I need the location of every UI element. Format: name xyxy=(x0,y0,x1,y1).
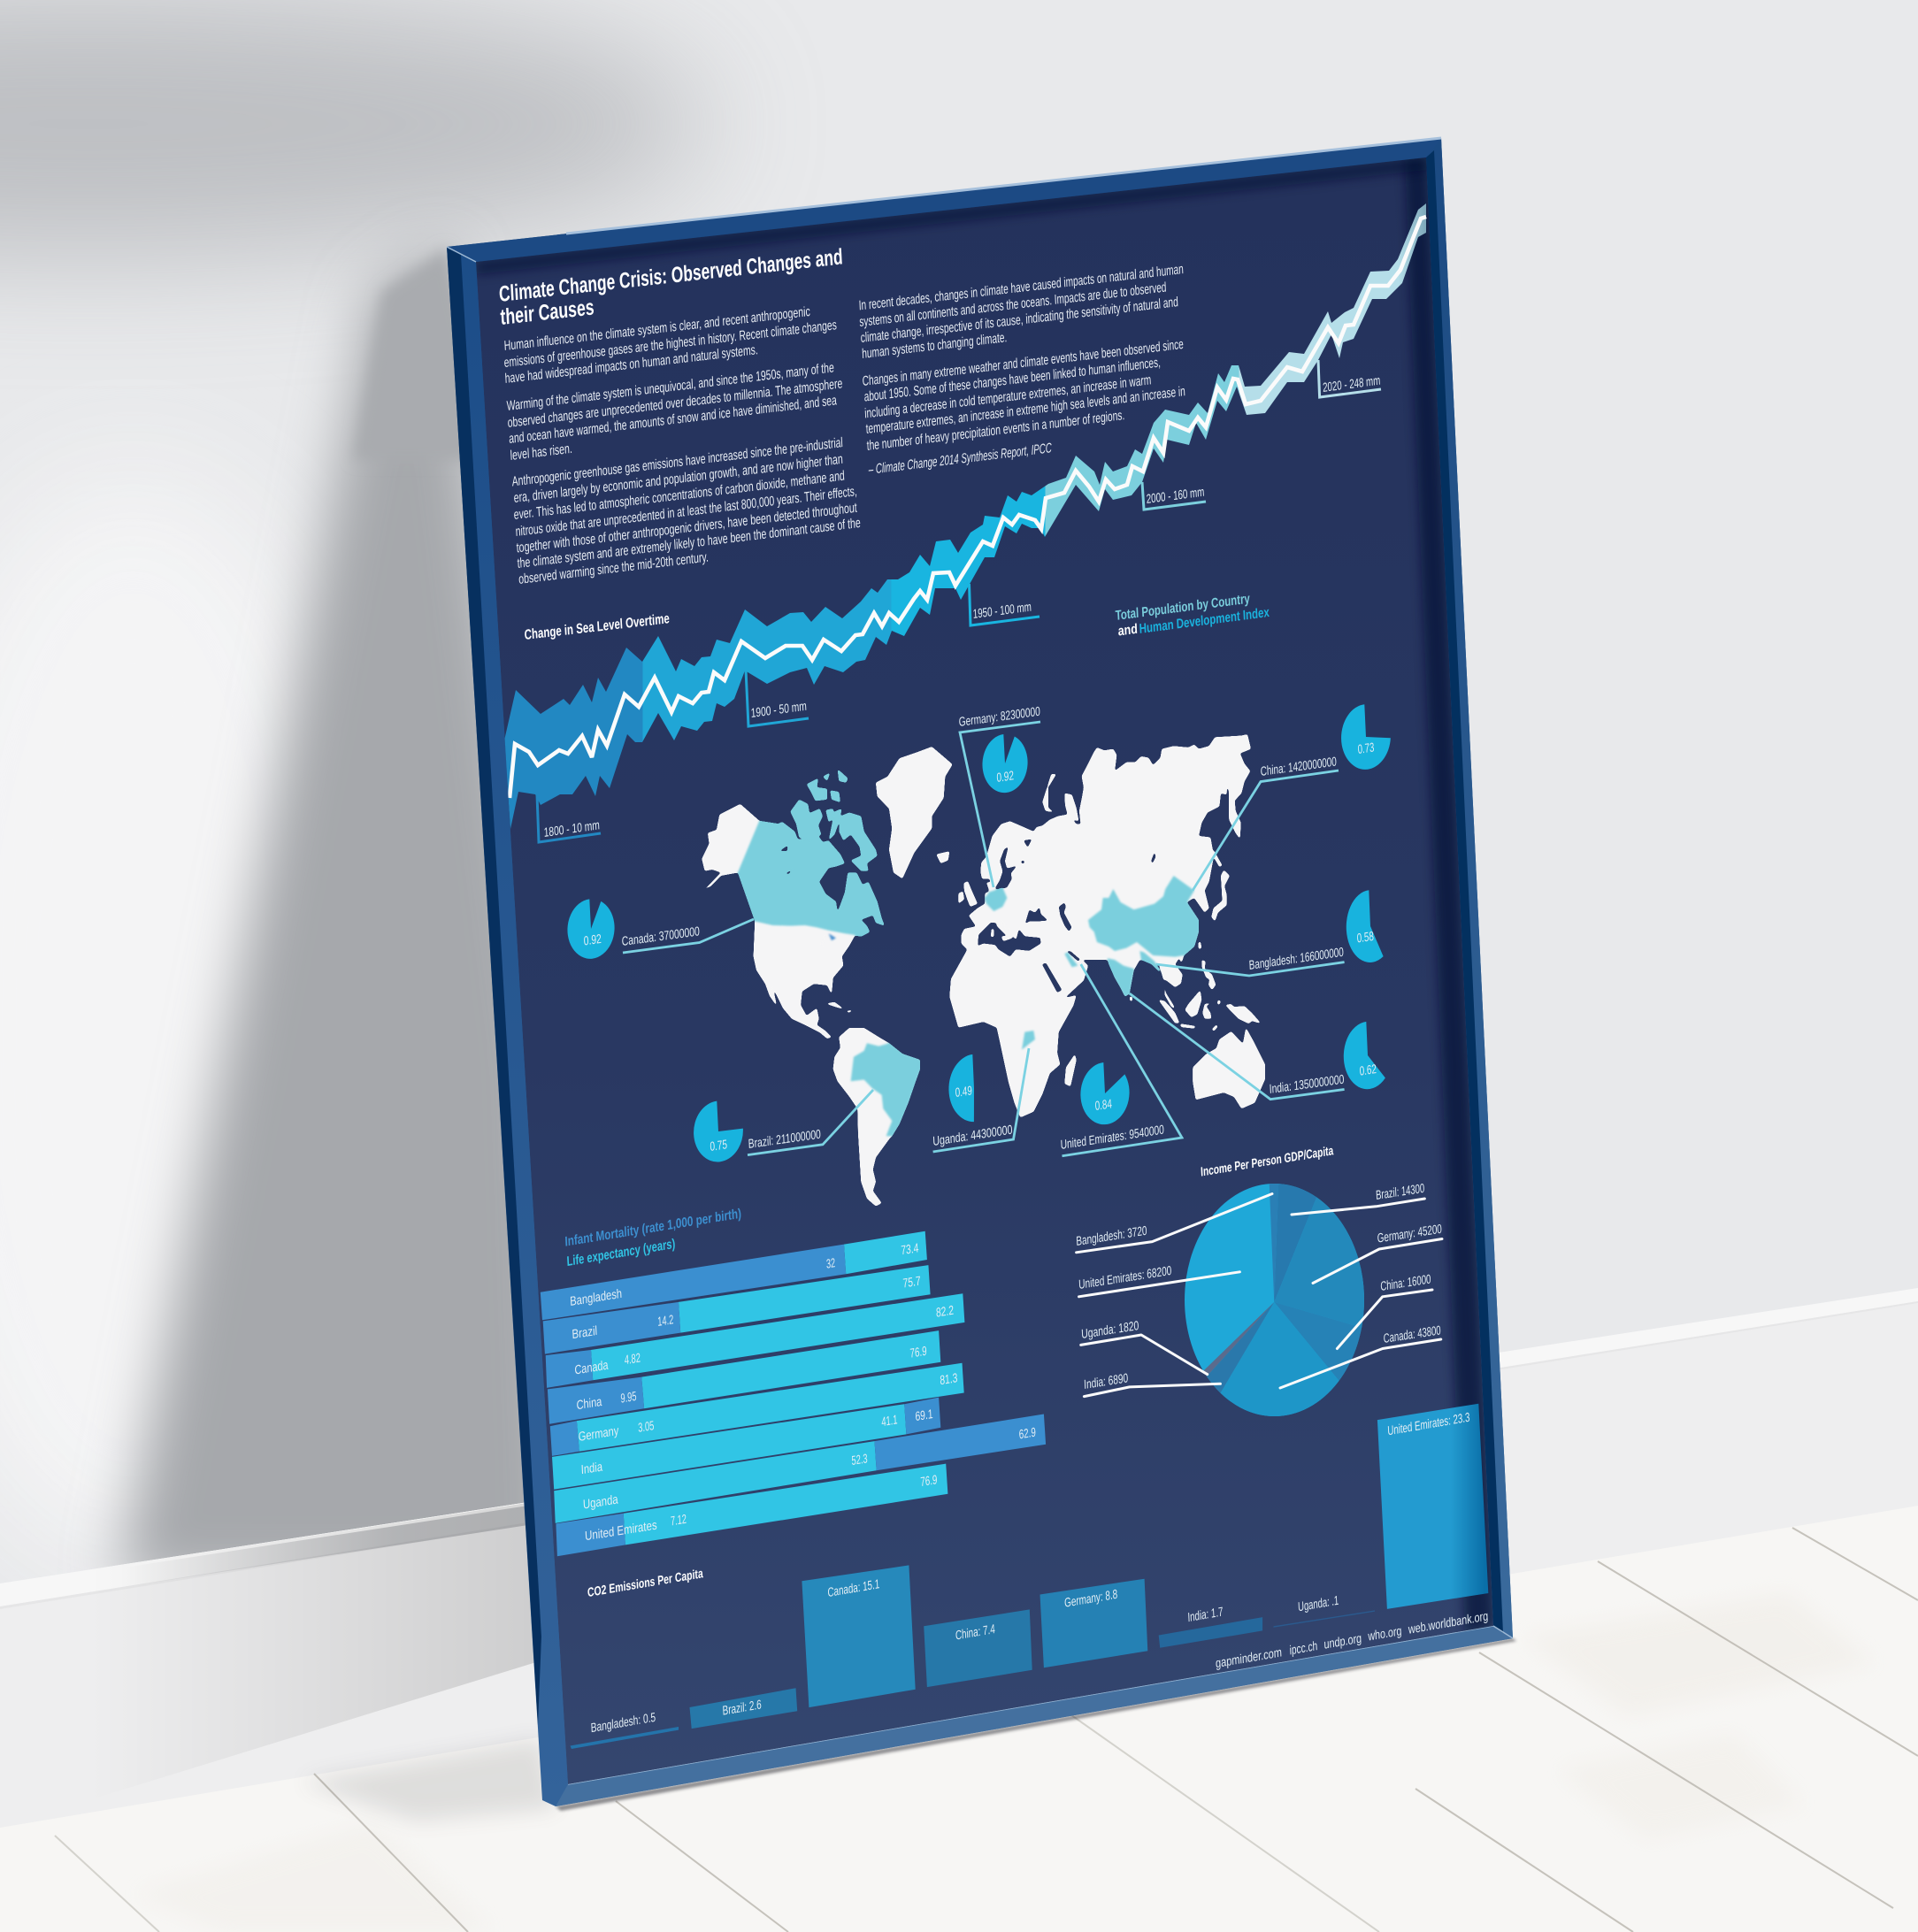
callout: China xyxy=(1193,702,1392,891)
callout: Brazil: Brazil: 211000000 xyxy=(748,1128,821,1152)
text column: right: including a decrease in cold temperature extremes, an increase in warm xyxy=(864,372,1152,421)
bar labels: Brazil xyxy=(572,1324,598,1342)
bar labels xyxy=(570,1241,1036,1544)
Alaska xyxy=(696,804,759,893)
map heading: Total Population by Country xyxy=(1115,592,1250,624)
CO2 labels: Bangladesh: 0.5 xyxy=(590,1711,656,1736)
map heading: Human Development Index xyxy=(1139,605,1270,637)
marker 2000 xyxy=(1142,482,1206,510)
pie labels: Brazil: 14300 xyxy=(1376,1182,1425,1203)
marker 1900: 1900 - 50 mm xyxy=(750,700,807,721)
bar labels: 82.2 xyxy=(936,1304,954,1321)
text column: right: Changes in many extreme weather and climate events have been observed since xyxy=(862,337,1184,389)
text column: left xyxy=(503,304,861,587)
highlighted countries xyxy=(985,876,1199,1050)
pie leaders xyxy=(1077,1194,1442,1397)
text column: right: – Climate Change 2014 Synthesis Report, IPCC xyxy=(868,441,1053,478)
sources: ipcc.ch xyxy=(1289,1639,1318,1658)
Brazil xyxy=(851,1043,920,1136)
callout: Bangladesh xyxy=(1156,889,1384,976)
callout: China: 0.73 xyxy=(1357,740,1375,757)
CO2 labels: India: 1.7 xyxy=(1187,1605,1224,1625)
text column: left: Human influence on the climate system is clear, and recent anthropogenic xyxy=(503,304,810,354)
poster sheet xyxy=(476,157,1493,1784)
sources xyxy=(1216,1609,1488,1671)
callout: India xyxy=(1130,993,1385,1100)
text column: right xyxy=(858,262,1185,478)
bar labels: Germany xyxy=(578,1424,619,1445)
bar labels: 75.7 xyxy=(902,1274,921,1292)
map: Americas and Greenland xyxy=(696,747,953,1206)
marker 1950: 1950 - 100 mm xyxy=(972,601,1032,622)
pie labels: Bangladesh: 3720 xyxy=(1076,1224,1147,1249)
callout: Brazil: 0.75 xyxy=(710,1138,727,1154)
intro heading: their Causes xyxy=(500,295,595,330)
callout: Brazil xyxy=(692,1090,873,1165)
text column: left: era, driven largely by economic and population growth, and are now higher than xyxy=(513,452,843,506)
intro heading xyxy=(499,248,842,325)
bar labels: 76.9 xyxy=(909,1345,927,1361)
callout: Germany: 0.92 xyxy=(996,769,1014,786)
bar labels: 32 xyxy=(826,1256,835,1272)
bar labels: Uganda xyxy=(583,1492,619,1513)
CO2 labels: Germany: 8.8 xyxy=(1064,1588,1118,1611)
map: Eurasia, Africa and Oceania xyxy=(949,734,1265,1117)
callout: United Emirates: United Emirates: 9540000 xyxy=(1060,1123,1164,1153)
bar labels: Bangladesh xyxy=(570,1287,622,1309)
uncertainty band xyxy=(504,203,1426,829)
wooden floor xyxy=(0,1506,1918,1932)
callout: Bangladesh: Bangladesh: 166000000 xyxy=(1248,946,1344,973)
marker 1900 xyxy=(746,670,809,726)
bar labels: 9.95 xyxy=(620,1390,637,1407)
bar labels: 76.9 xyxy=(920,1473,938,1490)
marker 2020: 2020 - 248 mm xyxy=(1323,374,1381,395)
legend: Infant Mortality (rate 1,000 per birth) xyxy=(564,1207,741,1250)
text column: left: observed changes are unprecedented over decades to millennia. The atmosphere xyxy=(507,376,843,431)
bar labels: India xyxy=(580,1460,603,1477)
pie wedges xyxy=(1130,1168,1422,1449)
chart heading: Change in Sea Level Overtime xyxy=(524,611,670,643)
CO2 labels: Brazil: 2.6 xyxy=(722,1698,762,1719)
text column: left: emissions of greenhouse gases are the highest in history. Recent climate changes xyxy=(503,318,837,371)
chart: income per person pie xyxy=(1076,1144,1442,1449)
pie labels: Uganda: 1820 xyxy=(1081,1319,1139,1342)
text column: left: nitrous oxide that are unprecedented in at least the last 800,000 years. Their effects, xyxy=(515,484,857,540)
pie labels: Canada: 43800 xyxy=(1383,1323,1441,1346)
bar labels: Canada xyxy=(574,1358,610,1378)
text column: left: level has risen. xyxy=(510,441,572,464)
baseboard xyxy=(0,1288,1918,1828)
callout: India: India: 1350000000 xyxy=(1269,1073,1345,1097)
legend xyxy=(564,1207,741,1269)
islands xyxy=(958,774,1262,1086)
text column: left: observed warming since the mid-20th century. xyxy=(518,549,709,587)
text column: left: Warming of the climate system is unequivocal, and since the 1950s, many of the xyxy=(506,360,834,414)
marker 2020 xyxy=(1318,360,1381,397)
text column: right: systems on all continents and across the oceans. Impacts are due to observed xyxy=(859,280,1167,330)
CO2 bars xyxy=(570,1404,1488,1749)
text column: left: together with those of other anthropogenic drivers, have been detected throughout xyxy=(516,501,858,556)
Canada xyxy=(738,769,885,937)
CO2 labels: Canada: 15.1 xyxy=(827,1577,880,1600)
callout: India: 0.62 xyxy=(1359,1062,1377,1079)
CO2 labels: United Emirates: 23.3 xyxy=(1387,1411,1470,1438)
CO2 labels: Uganda: .1 xyxy=(1298,1594,1339,1614)
sea level line xyxy=(510,217,1426,798)
marker 2000: 2000 - 160 mm xyxy=(1146,486,1205,507)
pie labels: China: 16000 xyxy=(1380,1272,1431,1294)
text column: right: the number of heavy precipitation events in a number of regions. xyxy=(866,408,1125,454)
pie labels: India: 6890 xyxy=(1084,1371,1129,1392)
bar labels: 52.3 xyxy=(851,1452,868,1468)
callout: Germany: Germany: 82300000 xyxy=(958,705,1040,730)
bar labels: 4.82 xyxy=(624,1351,641,1368)
bar labels: 14.2 xyxy=(657,1313,674,1330)
callout: Canada: 0.92 xyxy=(583,932,602,949)
pie labels xyxy=(1076,1182,1442,1392)
sources: undp.org xyxy=(1323,1631,1362,1652)
callout: Uganda: 0.49 xyxy=(955,1084,972,1100)
marker 1800: 1800 - 10 mm xyxy=(543,818,600,840)
South America xyxy=(833,1028,920,1206)
picture frame xyxy=(447,138,1513,1806)
bar labels: United Emirates xyxy=(585,1518,657,1544)
text column: left: and ocean have warmed, the amounts of snow and ice have diminished, and sea xyxy=(509,393,837,447)
callout: Uganda xyxy=(932,1048,1029,1152)
Greenland xyxy=(876,747,953,878)
text column: right: In recent decades, changes in climate have caused impacts on natural and human xyxy=(858,262,1184,313)
bar labels: 69.1 xyxy=(915,1407,933,1424)
CO2 heading: CO2 Emissions Per Capita xyxy=(587,1567,704,1600)
Eurasia and Africa xyxy=(949,734,1251,1117)
pie labels: United Emirates: 68200 xyxy=(1078,1264,1172,1292)
bar labels: 73.4 xyxy=(901,1241,919,1258)
map heading: and xyxy=(1117,622,1138,639)
map heading xyxy=(1115,592,1270,639)
bar labels: 41.1 xyxy=(881,1413,898,1430)
text column: left: Anthropogenic greenhouse gas emissions have increased since the pre-industrial xyxy=(511,435,843,490)
legend: Life expectancy (years) xyxy=(566,1237,676,1269)
marker 1800 xyxy=(537,794,601,842)
chart: CO2 emissions per capita xyxy=(570,1404,1488,1749)
callout: Canada: Canada: 37000000 xyxy=(621,924,700,949)
world map xyxy=(696,734,1265,1206)
Italy and Corsica xyxy=(991,919,1013,941)
callout: United Emirates xyxy=(1060,964,1182,1156)
callout: Germany xyxy=(958,705,1040,887)
United States and Central America xyxy=(754,921,855,1039)
callout: Uganda: Uganda: 44300000 xyxy=(932,1123,1013,1149)
callout: China: China: 1420000000 xyxy=(1260,755,1337,779)
bar labels: 81.3 xyxy=(940,1371,958,1388)
bar labels: 62.9 xyxy=(1018,1425,1036,1442)
Iceland xyxy=(936,851,949,863)
text column: left: have had widespread impacts on human and natural systems. xyxy=(504,342,758,387)
sources: gapminder.com xyxy=(1216,1645,1282,1671)
Australia xyxy=(1193,1028,1265,1108)
marker 1950 xyxy=(970,584,1040,625)
callout: United Emirates: 0.84 xyxy=(1094,1097,1112,1114)
bars xyxy=(541,1231,1046,1556)
pie heading: Income Per Person GDP/Capita xyxy=(1201,1144,1334,1180)
bar labels: 7.12 xyxy=(671,1513,687,1529)
bar labels: China xyxy=(576,1395,602,1413)
CO2 labels: China: 7.4 xyxy=(955,1622,995,1644)
sources: web.worldbank.org xyxy=(1408,1609,1488,1637)
intro heading: Climate Change Crisis: Observed Changes and xyxy=(498,244,843,307)
sources: who.org xyxy=(1367,1624,1402,1644)
chart: infant mortality and life expectancy bars xyxy=(541,1207,1046,1556)
text column: left: ever. This has led to atmospheric concentrations of carbon dioxide, methane and xyxy=(513,468,845,523)
callout: Canada xyxy=(566,896,754,962)
callout: Bangladesh: 0.58 xyxy=(1356,930,1374,947)
text column: left: the climate system and are extremely likely to have been the dominant cause of the xyxy=(517,516,861,571)
frame shadow on poster xyxy=(476,157,1493,1633)
pie labels: Germany: 45200 xyxy=(1377,1223,1442,1246)
text column: right: human systems to changing climate. xyxy=(862,330,1008,362)
poster shadow on wall xyxy=(119,247,566,1583)
text column: right: temperature extremes, an increase in extreme high sea levels and an increase in xyxy=(865,384,1185,437)
text column: right: about 1950. Some of these changes have been linked to human influences, xyxy=(863,355,1161,405)
chart: change in sea level xyxy=(504,203,1426,842)
text column: right: climate change, irrespective of its cause, indicating the sensitivity of natural and xyxy=(860,295,1178,346)
CO2 labels xyxy=(590,1411,1470,1736)
bar labels: 3.05 xyxy=(638,1419,655,1436)
